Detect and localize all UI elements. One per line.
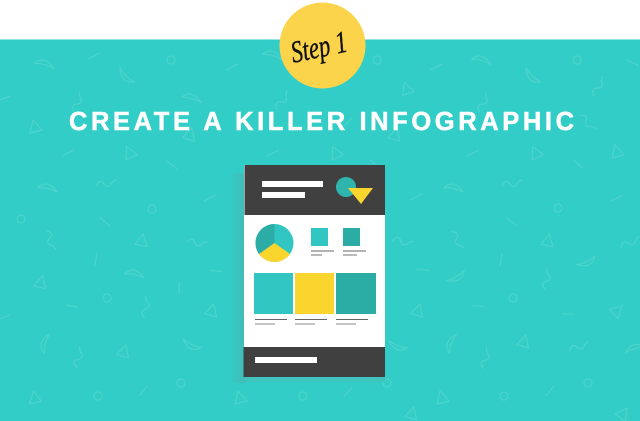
step badge: Step 1 (288, 24, 350, 70)
document header (244, 165, 385, 215)
document page (244, 165, 385, 377)
small stat blocks (311, 228, 366, 256)
pie chart (255, 224, 294, 262)
document illustration (232, 165, 385, 383)
title: CREATE A KILLER INFOGRAPHIC (69, 108, 574, 136)
large colour blocks (254, 273, 376, 324)
step badge (280, 2, 366, 88)
document footer (244, 347, 385, 377)
document shadow (232, 173, 245, 383)
